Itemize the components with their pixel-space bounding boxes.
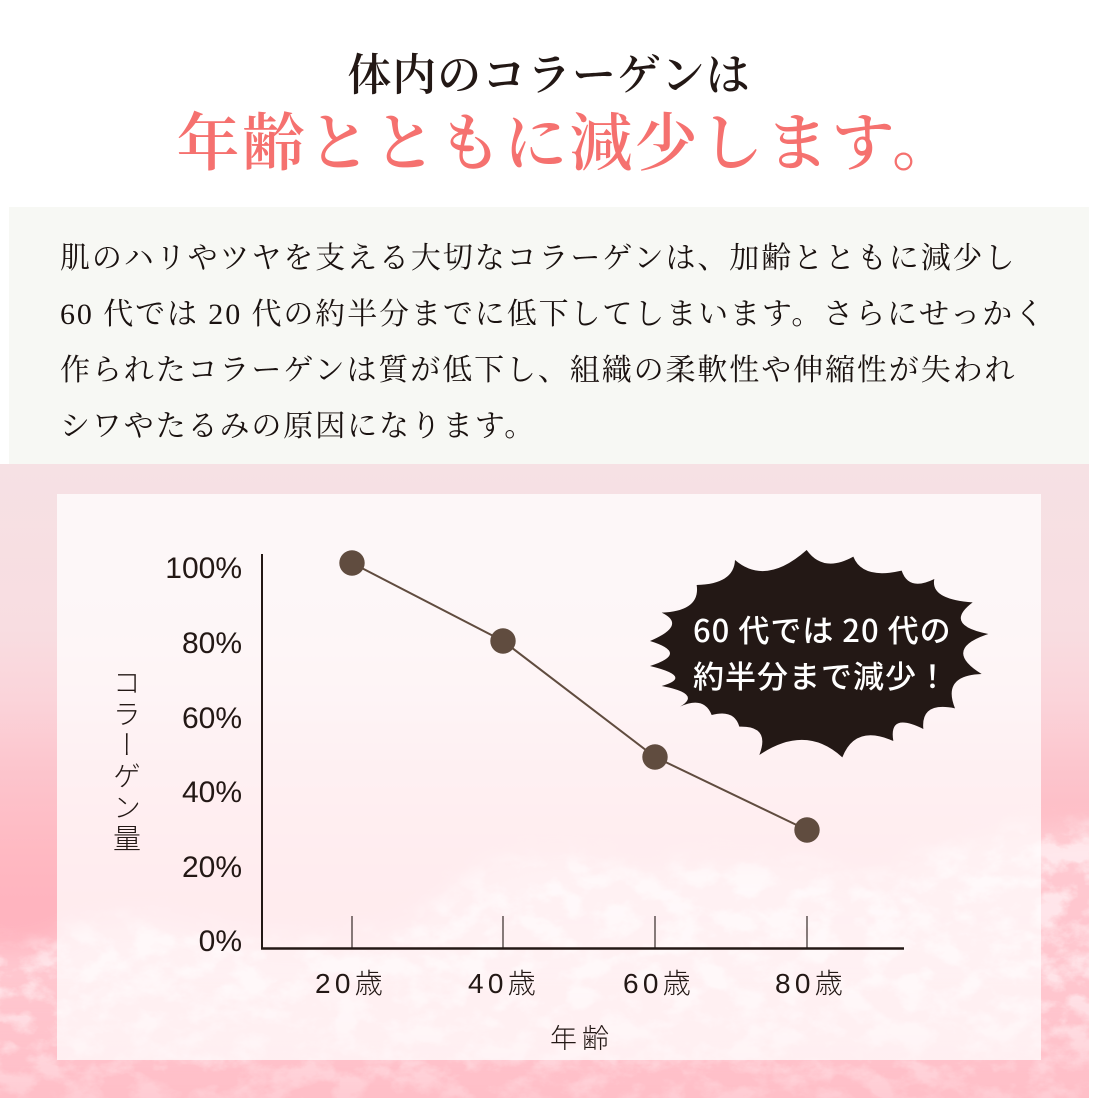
y axis tick labels: 80% [182,627,242,660]
data line [352,563,807,830]
y axis tick labels: 60% [182,702,242,735]
body text: 肌のハリやツヤを支える大切なコラーゲンは、加齢とともに減少し [60,242,1016,275]
y axis title: コラーゲン量 [110,668,141,855]
title line 1: 体内のコラーゲンは [347,51,751,100]
background: pink foam section [0,464,1089,1098]
body text [60,242,1046,443]
intro panel background [9,207,1089,464]
x axis tick labels: 60歳 [623,968,695,999]
body text: 60 代では 20 代の約半分までに低下してしまいます。さらにせっかく [60,298,1046,331]
body text: シワやたるみの原因になります。 [60,410,536,443]
x axis tick labels: 80歳 [775,968,847,999]
x axis tick labels: 40歳 [468,968,540,999]
callout text: 60 代では 20 代の [693,606,952,651]
chart axes [261,554,904,948]
x axis title: 年齢 [550,1024,614,1054]
x axis tick labels: 20歳 [315,968,387,999]
x axis tick labels [315,968,847,999]
data points [339,550,820,843]
y axis tick labels: 100% [165,552,242,585]
y axis tick labels: 20% [182,851,242,884]
body text: 作られたコラーゲンは質が低下し、組織の柔軟性や伸縮性が失われ [60,354,1016,387]
callout text [693,606,952,697]
y axis tick labels: 40% [182,776,242,809]
y axis tick labels: 0% [199,925,242,958]
title line 2: 年齢とともに減少します。 [177,109,957,179]
y axis tick labels [165,552,242,958]
callout burst [650,550,988,757]
panel: chart background [57,494,1041,1060]
callout text: 約半分まで減少！ [693,652,949,697]
